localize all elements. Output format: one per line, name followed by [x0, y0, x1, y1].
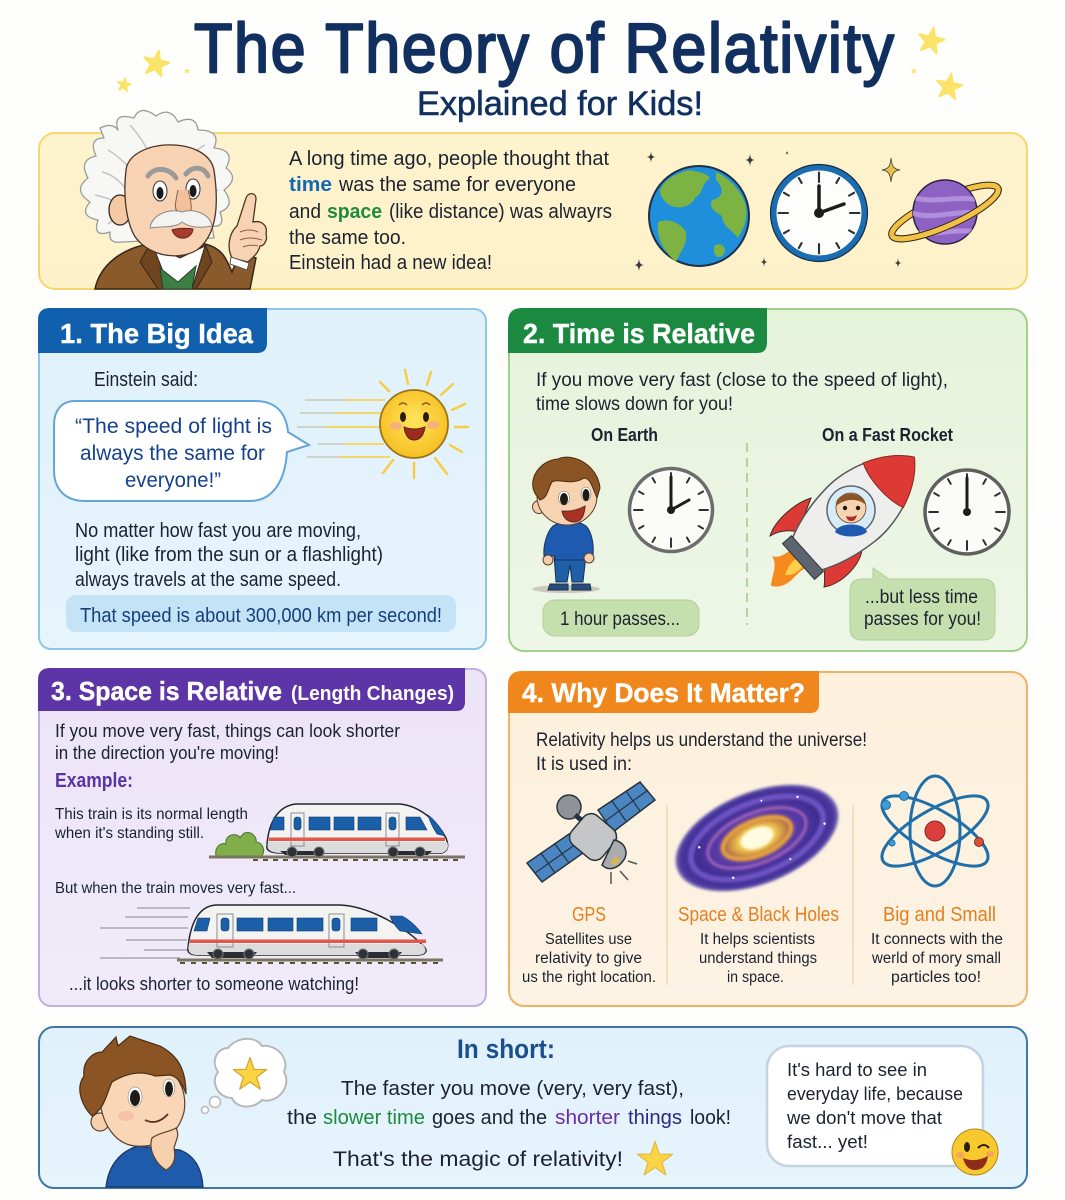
column: Space and Black Holes: It helps scientists	[700, 931, 815, 948]
note bubble: It's hard to see in	[787, 1059, 927, 1080]
intro text: the same too.	[289, 227, 406, 249]
speed lines	[100, 908, 190, 958]
column: Big and Small: werld of mory small	[871, 950, 1001, 967]
icon: star	[637, 1142, 673, 1175]
body text	[55, 721, 400, 763]
label: On a Fast Rocket: On a Fast Rocket	[822, 425, 953, 445]
column: GPS: GPS	[572, 904, 606, 926]
heading: In short: In short:	[457, 1034, 555, 1064]
panel: 4. Why Does It Matter	[508, 671, 1027, 1006]
column: Big and Small: particles too!	[891, 969, 981, 986]
column: GPS	[522, 904, 656, 986]
column: Space and Black Holes	[678, 904, 839, 986]
callout: less time passes	[850, 568, 995, 640]
icon: clock on rocket	[925, 470, 1009, 554]
icon: earth	[649, 166, 749, 266]
subtitle: Explained for Kids!	[417, 85, 703, 123]
body text	[75, 520, 383, 591]
column: Space and Black Holes: in space.	[727, 969, 784, 986]
note bubble: everyday life, because	[787, 1083, 963, 1104]
text: train at rest: This train is its normal length	[55, 806, 248, 823]
summary text: look!	[690, 1107, 731, 1129]
icon: satellite	[527, 782, 655, 884]
label: On Earth: On Earth	[591, 425, 658, 445]
heading tab	[38, 308, 267, 353]
heading tab: 3. Space is Relative	[51, 676, 282, 706]
intro text: time	[289, 174, 332, 196]
summary text: shorter	[555, 1107, 620, 1129]
body text: Relativity helps us understand the universe!	[536, 730, 867, 751]
column: Space and Black Holes: Space & Black Holes	[678, 904, 839, 926]
body text: light (like from the sun or a flashlight)	[75, 544, 383, 566]
icon: ringed planet	[888, 179, 1002, 245]
intro text: and	[289, 201, 321, 223]
column: GPS: us the right location.	[522, 969, 656, 986]
body text	[536, 370, 948, 415]
speech bubble	[54, 401, 309, 501]
body text: If you move very fast, things can look shorter	[55, 721, 400, 741]
panel: 3. Space is Relative	[38, 668, 486, 1006]
summary text: goes and the	[432, 1107, 547, 1129]
label: Example: Example:	[55, 770, 133, 792]
summary text: slower time	[323, 1107, 425, 1129]
text: train at rest: when it's standing still.	[54, 825, 204, 842]
illustration: Einstein	[80, 110, 267, 289]
speech bubble: always the same for	[80, 441, 265, 465]
body text	[536, 730, 867, 775]
intro text: space	[327, 201, 382, 223]
illustration: rocket	[770, 430, 939, 588]
callout: less time passes: passes for you!	[864, 609, 981, 630]
icon: sun with light rays	[297, 370, 468, 478]
heading tab	[508, 671, 819, 713]
panel: 1. The Big Idea	[38, 308, 486, 649]
text: looks shorter: ...it looks shorter to someone watching!	[69, 974, 359, 994]
note bubble	[767, 1046, 983, 1166]
body text: in the direction you're moving!	[55, 743, 279, 763]
callout: speed of light: That speed is about 300,000 km per second!	[80, 605, 442, 627]
heading tab	[38, 668, 465, 711]
title: The Theory of Relativity	[194, 10, 894, 88]
heading tab: (Length Changes)	[291, 683, 454, 705]
icon: clock on earth	[630, 468, 712, 552]
closing line: That's the magic of relativity!	[333, 1148, 623, 1171]
sparkles	[634, 151, 902, 271]
icon: bush	[216, 832, 264, 856]
column: Big and Small: Big and Small	[883, 904, 996, 926]
body text: always travels at the same speed.	[75, 569, 341, 591]
intro text: was the same for everyone	[338, 174, 576, 196]
illustration: boy on earth	[532, 457, 600, 593]
note bubble: we don't move that	[786, 1107, 942, 1128]
column: Space and Black Holes: understand things	[699, 950, 817, 967]
body text: time slows down for you!	[536, 394, 733, 415]
summary text: things	[628, 1107, 682, 1129]
callout: 1 hour passes	[543, 600, 699, 636]
panel: In short	[39, 1027, 1027, 1188]
intro text	[289, 148, 612, 274]
column: Big and Small: It connects with the	[871, 931, 1003, 948]
callout: less time passes: ...but less time	[865, 587, 978, 608]
callout: speed of light	[66, 595, 456, 632]
summary text: The faster you move (very, very fast),	[341, 1078, 684, 1100]
text: train moving: But when the train moves very fast...	[55, 880, 296, 897]
speech bubble: “The speed of light is	[75, 414, 272, 438]
illustration: train moving	[177, 905, 443, 963]
icon: atom	[873, 776, 997, 886]
column: Big and Small	[871, 904, 1003, 986]
icon: galaxy	[660, 763, 854, 913]
heading tab: 4. Why Does It Matter?	[522, 678, 805, 708]
text: train at rest	[54, 806, 248, 842]
panel: intro	[39, 110, 1027, 289]
intro text: A long time ago, people thought that	[289, 148, 609, 170]
icon: star	[233, 1058, 267, 1089]
summary text: the	[287, 1107, 317, 1129]
body text: If you move very fast (close to the speed of light),	[536, 370, 948, 391]
decorative stars	[116, 25, 964, 100]
callout: 1 hour passes: 1 hour passes...	[560, 609, 680, 630]
heading tab: 2. Time is Relative	[523, 318, 755, 349]
thought bubble	[202, 1039, 286, 1114]
icon: clock	[770, 164, 868, 262]
speech bubble: everyone!”	[125, 468, 221, 492]
heading tab: 1. The Big Idea	[60, 318, 253, 349]
intro text: Einstein had a new idea!	[289, 252, 492, 274]
body text: No matter how fast you are moving,	[75, 520, 361, 542]
text: Einstein said: Einstein said:	[94, 369, 198, 391]
title	[194, 10, 894, 123]
body text: It is used in:	[536, 754, 632, 775]
heading tab	[508, 308, 767, 353]
icon: winking emoji	[952, 1129, 998, 1175]
panel: 2. Time is Relative	[508, 308, 1027, 651]
column: GPS: relativity to give	[535, 950, 642, 967]
summary text	[287, 1078, 731, 1129]
illustration: train standing	[209, 804, 465, 860]
intro text: (like distance) was alwayrs	[389, 201, 612, 223]
note bubble: fast... yet!	[787, 1131, 868, 1152]
illustration: thinking boy	[80, 1036, 203, 1187]
column: GPS: Satellites use	[545, 931, 632, 948]
